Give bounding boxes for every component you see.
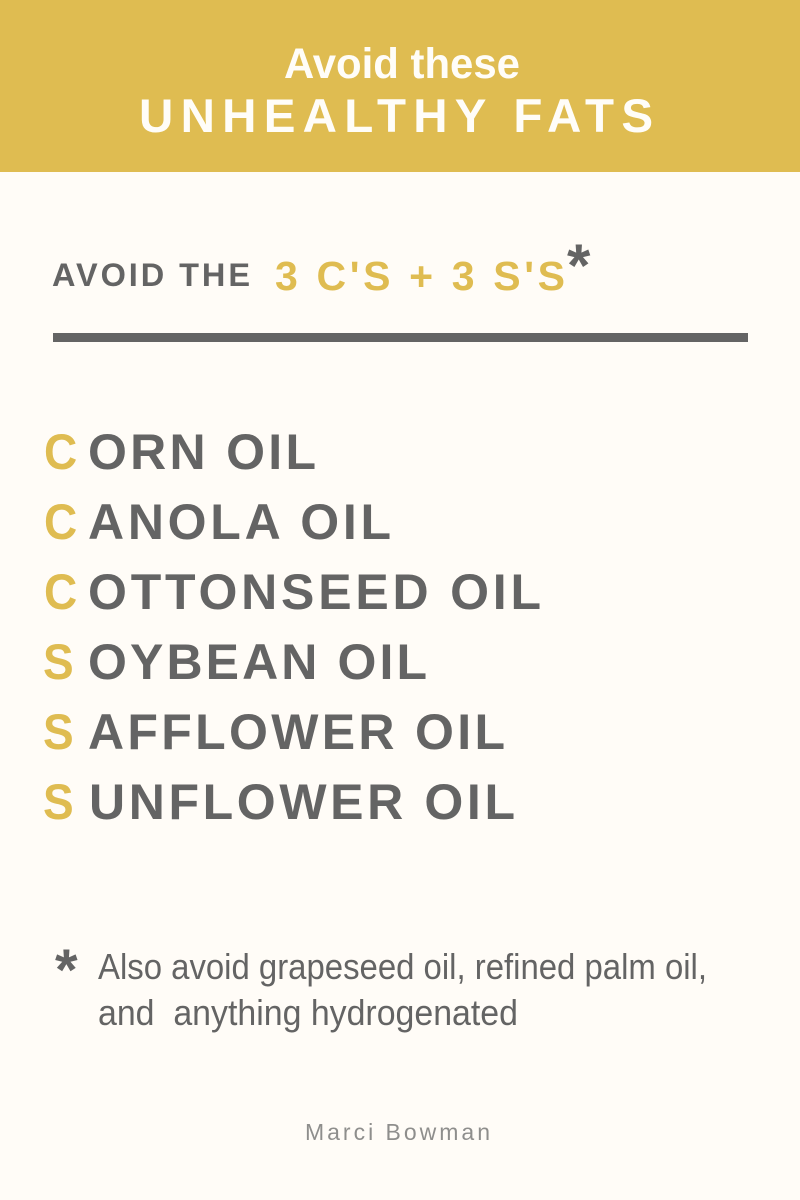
safflower oil: S [43, 705, 74, 760]
soybean oil: S [43, 635, 74, 690]
header banner [0, 0, 800, 172]
safflower oil: AFFLOWER OIL [88, 704, 505, 760]
author credit: Marci Bowman [305, 1119, 490, 1145]
footnote asterisk: * [55, 938, 78, 1003]
footnote text: Also avoid grapeseed oil, refined palm oil, [98, 946, 707, 987]
footnote text: and anything hydrogenated [98, 992, 518, 1033]
sunflower oil: S [43, 775, 74, 830]
soybean oil: OYBEAN OIL [88, 634, 427, 690]
sunflower oil: UNFLOWER OIL [89, 774, 515, 830]
title line 2: UNHEALTHY FATS [139, 90, 653, 143]
corn oil: ORN OIL [88, 424, 316, 480]
cottonseed oil: C [44, 565, 77, 620]
divider rule [53, 333, 748, 342]
cottonseed oil: OTTONSEED OIL [88, 564, 541, 620]
subheading [52, 232, 591, 299]
canola oil: ANOLA OIL [88, 494, 391, 550]
subheading: AVOID THE [52, 257, 250, 293]
title line 1: Avoid these [284, 40, 520, 88]
list of oils [43, 424, 541, 830]
corn oil: C [44, 425, 77, 480]
subheading: * [567, 232, 591, 299]
subheading: 3 C'S + 3 S'S [275, 253, 565, 299]
footnote [55, 938, 707, 1033]
footnote text [98, 946, 707, 1033]
canola oil: C [44, 495, 77, 550]
